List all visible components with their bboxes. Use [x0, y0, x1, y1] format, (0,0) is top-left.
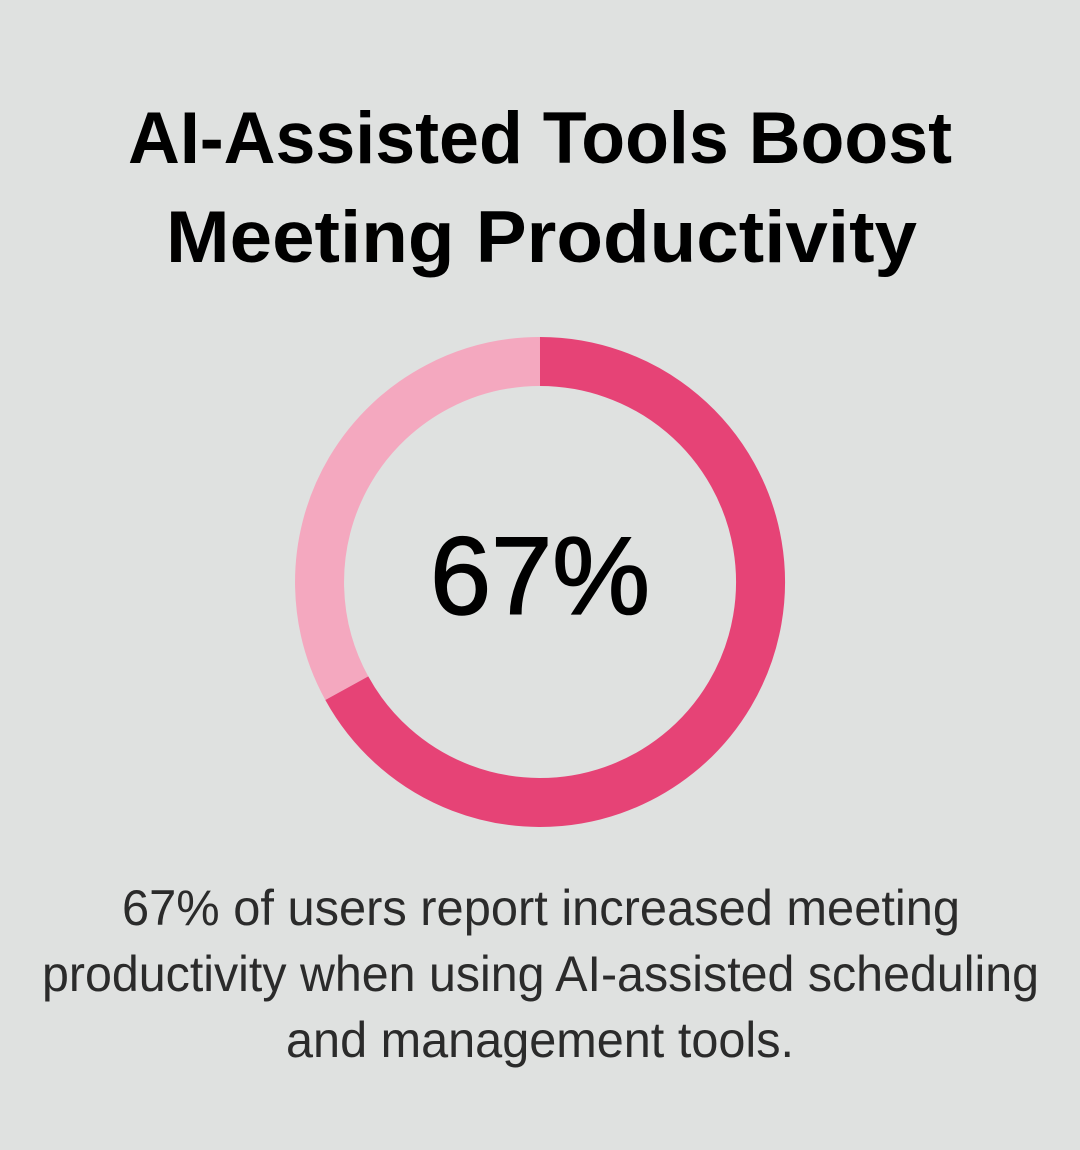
title: AI-Assisted Tools Boost: [128, 98, 952, 179]
description text: and management tools.: [286, 1012, 794, 1068]
remaining 33 percent segment: [320, 362, 540, 688]
center value: 67%: [430, 515, 650, 638]
title: [128, 98, 952, 278]
67 percent segment: [347, 362, 761, 802]
description text: 67% of users report increased meeting: [122, 880, 960, 936]
donut chart: 67 percent: [320, 362, 761, 802]
description text: [42, 880, 1039, 1068]
title: Meeting Productivity: [166, 197, 917, 278]
description text: productivity when using AI-assisted scheduling: [42, 946, 1039, 1002]
